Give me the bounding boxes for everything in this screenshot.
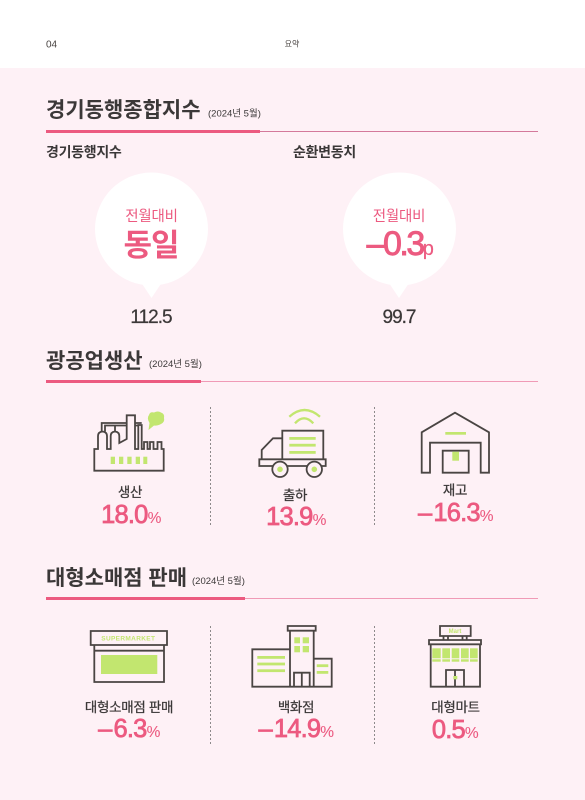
icon: supermarket bbox=[91, 631, 167, 682]
page header: 04 bbox=[46, 40, 58, 50]
speech bubble bbox=[95, 172, 208, 298]
heading: large retail sales: 대형소매점 판매 bbox=[46, 567, 187, 590]
item: production: 생산 bbox=[118, 485, 142, 500]
heading: composite index: 경기동행종합지수 bbox=[46, 99, 201, 122]
item: production bbox=[101, 485, 162, 529]
item: inventory bbox=[418, 483, 494, 527]
panel: leading coincident index: 경기동행지수 bbox=[46, 144, 122, 160]
panel: cyclical variation: –0.3p bbox=[367, 225, 434, 263]
item: large retail: 대형소매점 판매 bbox=[85, 700, 173, 715]
page header: 요약 bbox=[285, 38, 300, 48]
panel: leading coincident index bbox=[46, 144, 208, 328]
heading: large retail sales: (2024년 5월) bbox=[192, 575, 245, 587]
page header bbox=[0, 0, 585, 68]
item: shipments bbox=[266, 488, 327, 531]
item: production: 18.0% bbox=[101, 501, 162, 529]
icon: warehouse bbox=[422, 413, 489, 473]
heading: large retail sales bbox=[46, 567, 538, 600]
panel: cyclical variation: 99.7 bbox=[383, 307, 416, 328]
heading: composite index: (2024년 5월) bbox=[208, 108, 261, 120]
item: inventory: –16.3% bbox=[418, 499, 494, 527]
panel: leading coincident index: 112.5 bbox=[130, 307, 172, 328]
icon: supermarket: SUPERMARKET bbox=[101, 636, 155, 643]
icon: delivery truck bbox=[259, 410, 326, 477]
item: large retail bbox=[85, 700, 173, 743]
heading: composite index bbox=[46, 99, 538, 133]
item: department store: 백화점 bbox=[278, 700, 314, 715]
speech bubble bbox=[343, 172, 456, 298]
dividers bbox=[210, 407, 212, 526]
icon: department store bbox=[252, 626, 332, 687]
heading: industrial production: (2024년 5월) bbox=[149, 358, 202, 370]
item: department store bbox=[258, 700, 334, 743]
panel: cyclical variation bbox=[293, 144, 456, 328]
dividers bbox=[210, 626, 212, 744]
icon: hypermarket: Mart bbox=[449, 629, 461, 635]
panel: cyclical variation: 전월대비 bbox=[373, 208, 425, 225]
item: hypermarket: 0.5% bbox=[432, 716, 479, 744]
panel: cyclical variation: 순환변동치 bbox=[293, 144, 356, 160]
item: shipments: 13.9% bbox=[266, 503, 327, 531]
item: shipments: 출하 bbox=[283, 488, 308, 503]
heading: industrial production bbox=[46, 350, 538, 383]
item: inventory: 재고 bbox=[443, 483, 467, 498]
item: hypermarket bbox=[431, 700, 480, 744]
item: department store: –14.9% bbox=[258, 715, 334, 743]
heading: industrial production: 광공업생산 bbox=[46, 350, 143, 373]
panel: leading coincident index: 전월대비 bbox=[125, 208, 178, 225]
item: hypermarket: 대형마트 bbox=[431, 700, 480, 715]
icon: hypermarket bbox=[429, 626, 481, 687]
item: large retail: –6.3% bbox=[98, 715, 161, 743]
icon: factory bbox=[94, 412, 164, 471]
panel: leading coincident index: 동일 bbox=[123, 228, 179, 263]
